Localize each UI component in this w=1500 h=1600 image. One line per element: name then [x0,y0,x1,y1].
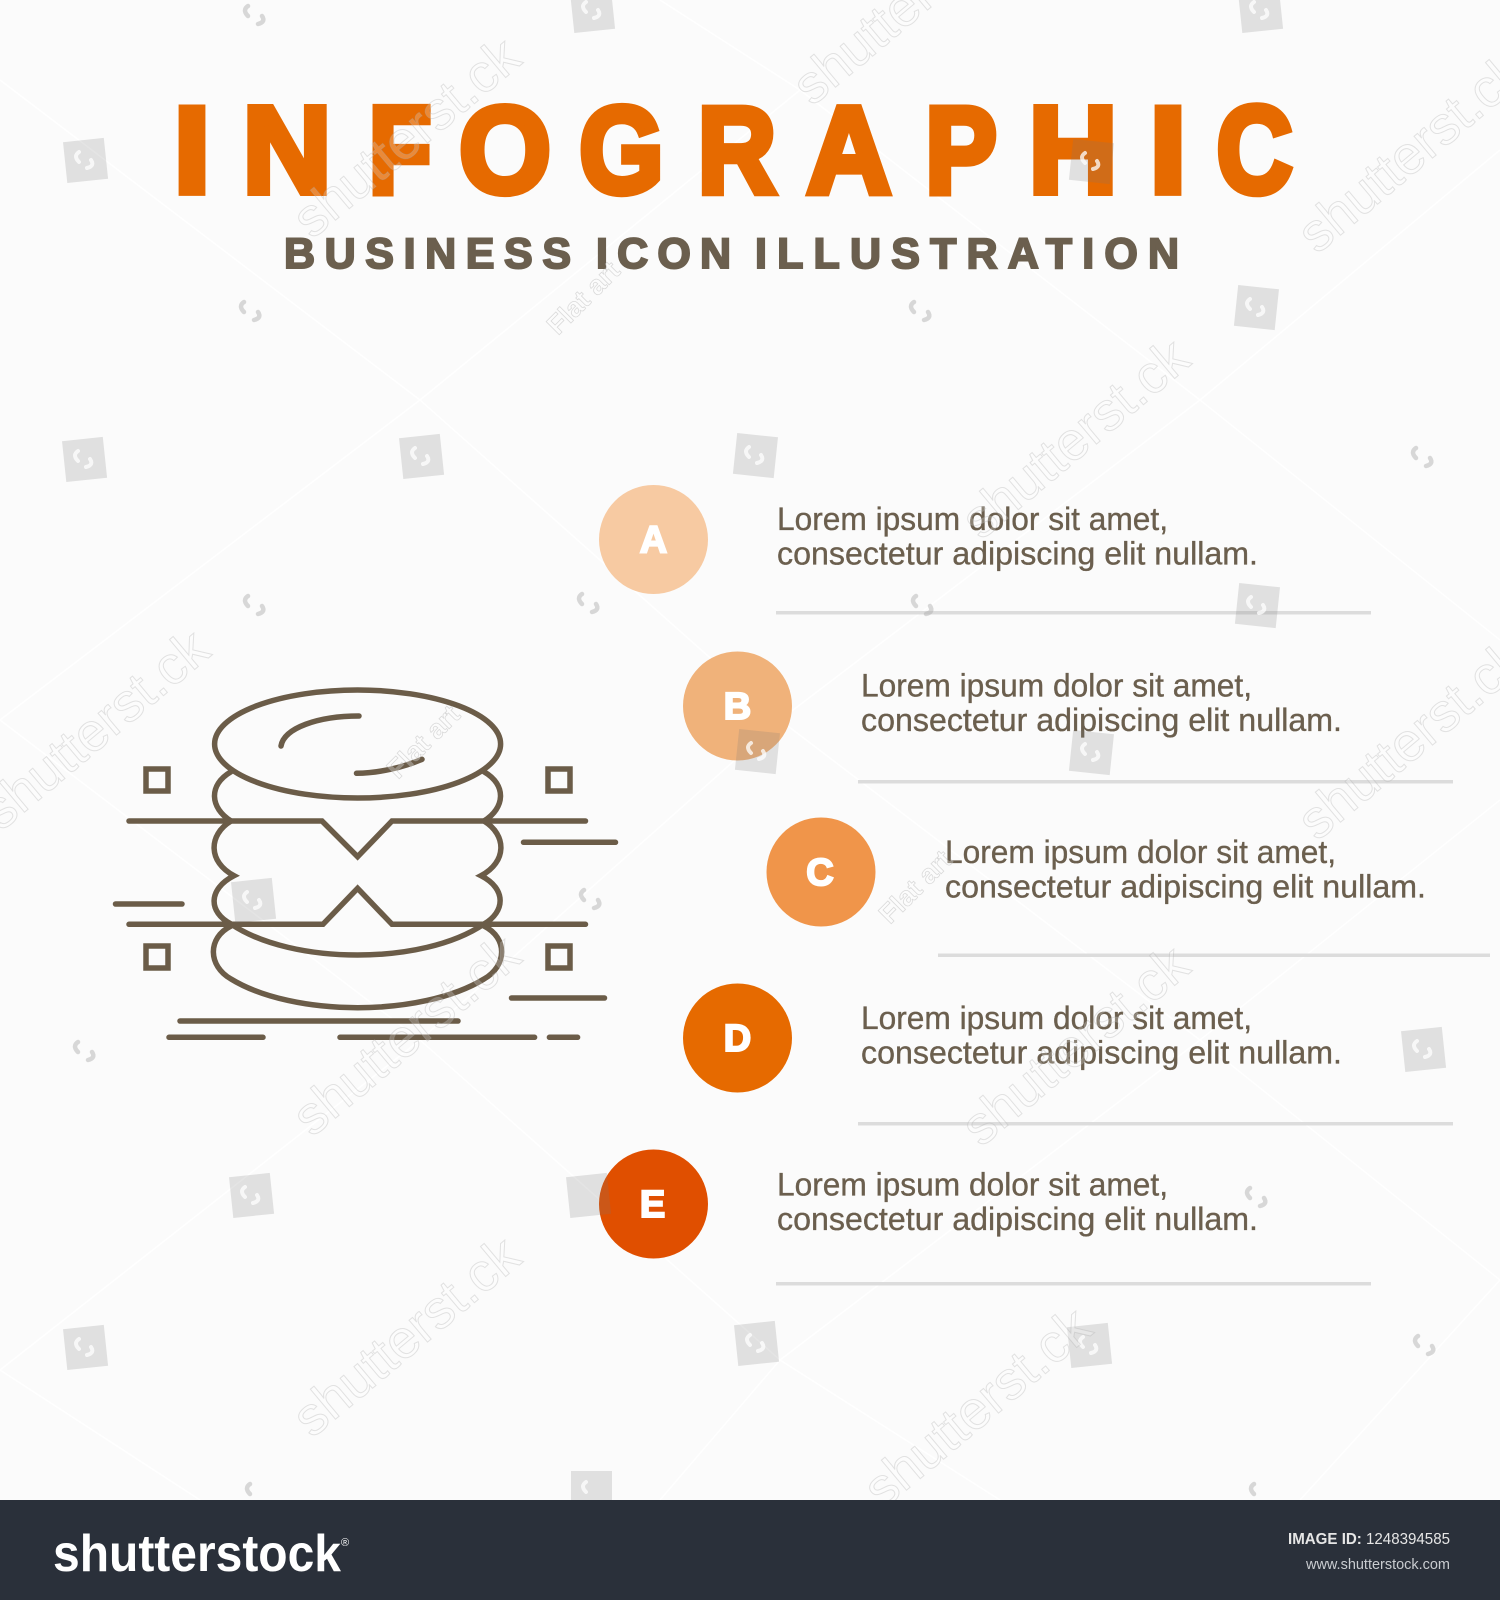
text A [777,501,1258,572]
text B: consectetur adipiscing elit nullam. [861,702,1342,738]
badge E: E [640,1184,665,1226]
title: N [243,82,331,220]
text C: Lorem ipsum dolor sit amet, [945,834,1336,870]
badge A [599,485,708,594]
text D [861,1000,1342,1070]
title: I [173,82,211,219]
badge B: B [724,686,751,728]
text C [945,834,1426,904]
title: C [1217,83,1292,219]
badge D [683,984,792,1092]
text E: Lorem ipsum dolor sit amet, [777,1166,1168,1202]
watermark overlay: shutterst.ck [950,933,1201,1157]
watermark overlay: Flat art [381,699,466,784]
title: G [579,81,664,219]
badge C: C [806,852,834,894]
text B [861,668,1342,738]
title: H [1029,82,1117,220]
subtitle: ILLUSTRATION [755,230,1179,278]
subtitle [284,230,1179,278]
step A [599,485,1371,614]
step D [683,984,1453,1126]
footer logo: ® [341,1537,349,1549]
text E [777,1166,1258,1237]
watermark overlay: shutterst.ck [281,1224,532,1448]
text A: consectetur adipiscing elit nullam. [777,536,1258,572]
image id: IMAGE ID: 1248394585 [1288,1531,1450,1548]
text B: Lorem ipsum dolor sit amet, [861,668,1252,704]
footer logo: shutterstock [53,1525,341,1583]
text D: consectetur adipiscing elit nullam. [861,1034,1342,1070]
watermark overlay: Flat art [541,255,626,340]
badge E [599,1150,708,1258]
title: R [698,81,776,219]
title: A [807,82,891,219]
title: P [925,83,997,219]
footer bar [0,1500,1500,1600]
step E [599,1150,1371,1286]
text E: consectetur adipiscing elit nullam. [777,1201,1258,1237]
website: www.shutterstock.com [1305,1556,1450,1573]
text C: consectetur adipiscing elit nullam. [945,868,1426,904]
title [173,81,1292,220]
watermark overlay: shutterst.ck [281,25,532,249]
badge B [683,652,792,760]
step C [766,818,1490,957]
badge C [766,818,876,926]
watermark overlay: shutterst.ck [852,1295,1103,1519]
badge A: A [640,520,667,562]
subtitle: BUSINESS [284,230,571,278]
step B [683,652,1453,784]
icon: layered data stack [116,690,616,1037]
title: O [459,81,551,219]
badge D: D [724,1018,751,1060]
subtitle: ICON [596,230,731,278]
watermark overlay: shutterst.ck [950,326,1201,550]
title: I [1149,82,1187,219]
title: F [369,82,431,219]
text D: Lorem ipsum dolor sit amet, [861,1000,1252,1036]
watermark overlay: shutterst.ck [281,923,532,1147]
text A: Lorem ipsum dolor sit amet, [777,501,1168,537]
watermark overlay: Flat art [873,844,958,929]
